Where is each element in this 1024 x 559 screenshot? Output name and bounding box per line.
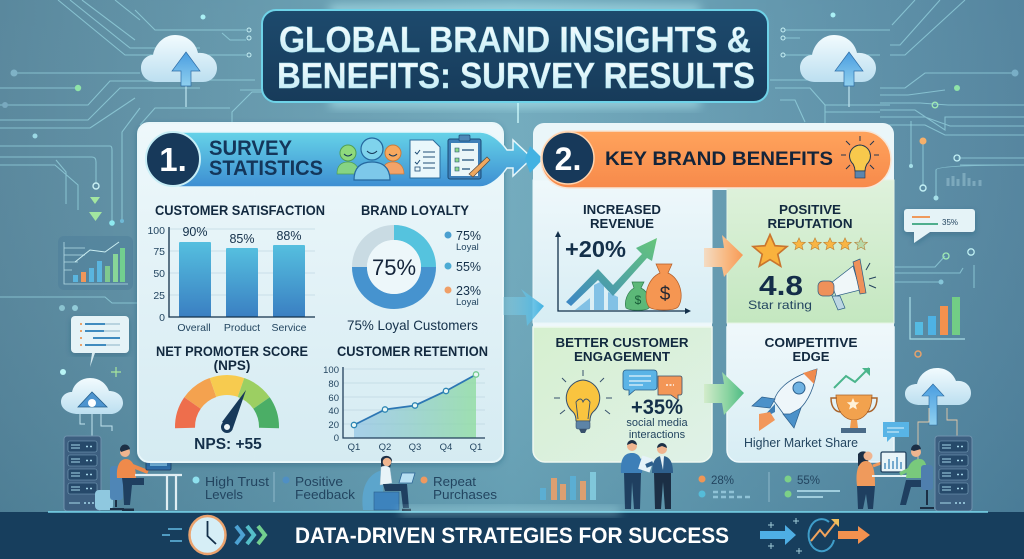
icon: stars [753,234,867,266]
circuit lines right [880,0,1024,357]
customer satisfaction chart: 75 [153,246,165,258]
legend: high trust levels [192,474,269,502]
header text 1: STATISTICS [209,157,323,180]
mini stats bottom [698,472,840,502]
icon: person at desk left [110,444,182,510]
customer retention chart: 40 [328,406,339,417]
nps gauge: (NPS) [214,358,250,373]
customer retention chart: Q4 [440,442,452,453]
icon: growth arrows [760,518,870,554]
icon: lightbulb header [841,136,879,178]
icon: clipboard [448,135,490,179]
legend: positive feedback: Feedback [295,487,356,502]
donut legend: 55% [456,260,481,274]
customer satisfaction chart: Service [271,322,307,334]
customer satisfaction chart: 0 [159,312,165,324]
legend: high trust levels: Levels [205,487,244,502]
customer satisfaction chart: 88% [276,229,302,243]
donut legend: Loyal [456,242,479,253]
donut legend: 75% [456,229,481,243]
arrow tip: statistics to benefits [525,146,543,173]
footer text: DATA-DRIVEN STRATEGIES FOR SUCCESS [295,523,729,548]
donut legend: Loyal [456,297,479,308]
icon: money bags: $ [660,284,671,305]
icon: trophy with trend arrow [831,368,877,433]
quadrant: competitive edge [727,327,894,462]
icon: cloud upload top left [141,35,217,107]
customer satisfaction chart: CUSTOMER SATISFACTION [155,202,325,218]
section header 2 [541,131,891,188]
icon: checklist document [410,140,440,178]
customer retention chart: 80 [328,379,339,390]
panel: key brand benefits [525,123,894,462]
customer retention chart: 0 [334,433,339,444]
number badge 2: 2. [555,141,581,177]
legend: repeat purchases: Repeat [433,474,476,489]
number badge 2 [542,132,594,184]
quadrant: better customer engagement [533,327,712,462]
icon: presenting woman [856,451,884,509]
icon: chat bubble right: 35% [942,218,958,227]
customer satisfaction chart: Overall [177,322,211,334]
legend: positive feedback: Positive [295,474,343,489]
header text 1 [209,137,323,180]
quadrant: better customer engagement: interactions [629,429,686,441]
quadrant: better customer engagement: BETTER CUSTOMER [556,335,689,350]
connector arrow between panels [503,289,544,326]
customer retention chart: 60 [328,393,339,404]
section header 2: KEY BRAND BENEFITS [605,148,833,170]
icon: cloud upload top right [800,35,876,107]
header text 1: SURVEY [209,137,292,160]
icon: cloud and server left [60,367,123,511]
icon: megaphone [818,259,876,310]
customer retention chart: Q3 [409,442,421,453]
number badge 1: 1. [159,141,187,178]
customer retention chart: Q2 [379,442,391,453]
brand loyalty donut: 75% [372,255,416,280]
quadrant: competitive edge: EDGE [792,349,830,364]
title banner [262,5,768,107]
customer satisfaction chart: Product [224,322,260,334]
quadrant: better customer engagement: ENGAGEMENT [574,349,670,364]
customer satisfaction chart: 25 [153,290,165,302]
customer retention chart [323,344,488,453]
number badge 1 [146,132,200,186]
quadrant: positive reputation: Star rating [748,298,812,312]
customer retention chart: Q1 [470,442,482,453]
mini bar chart bottom [540,472,596,500]
brand loyalty donut: BRAND LOYALTY [361,202,470,218]
customer retention chart: Q1 [348,442,360,453]
donut legend [444,229,481,308]
icon: small chart left [58,236,133,290]
icon: chat bubbles [623,370,682,400]
icon: chat bubble right [904,209,975,243]
icon: woman with laptop [362,456,415,510]
icon: chat list left [59,305,129,367]
quadrant: better customer engagement: +35% [631,396,683,419]
arrow: engagement to competitive edge [704,372,744,415]
quadrant: positive reputation: REPUTATION [768,217,852,231]
legend: high trust levels: High Trust [205,474,269,489]
quadrant: increased revenue: +20% [565,236,626,262]
brand loyalty donut: 75% Loyal Customers [347,317,478,333]
customer satisfaction chart: 100 [147,225,165,237]
icon: money bags [625,264,681,310]
nps gauge [156,344,308,453]
icon: chevrons [236,526,265,544]
arrow: revenue to reputation [704,235,743,277]
quadrant: increased revenue: REVENUE [590,217,654,231]
icon: people [337,138,404,180]
icon: man at monitor [872,444,934,508]
section header 1 [146,132,532,187]
legend: repeat purchases [420,474,498,502]
legend: repeat purchases: Purchases [433,487,498,502]
quadrant: increased revenue: INCREASED [583,203,661,217]
quadrant: competitive edge: COMPETITIVE [764,335,858,350]
legend: positive feedback [282,474,356,502]
quadrant: positive reputation [727,180,894,323]
customer satisfaction chart: 90% [182,225,208,239]
customer retention chart: 100 [323,365,339,376]
donut legend: 23% [456,284,481,298]
mini stats bottom: 55% [797,475,820,487]
bars [179,242,305,317]
customer retention chart: 20 [328,420,339,431]
panel: survey statistics [138,123,532,462]
icon: clock [162,516,226,554]
title text: GLOBAL BRAND INSIGHTS & [279,19,751,60]
quadrant: increased revenue [533,180,712,323]
mini stats bottom: 28% [711,475,734,487]
icon: lightbulb [554,370,612,433]
icon: bar chart right [910,297,965,339]
customer satisfaction chart: 85% [229,232,255,246]
icon: cloud and server right [905,368,972,511]
brand loyalty donut [347,202,481,333]
circuit lines left [0,0,200,303]
icon: two colleagues [621,440,673,509]
customer retention chart: CUSTOMER RETENTION [337,344,488,359]
nps gauge: NPS: +55 [194,436,262,453]
nps gauge: NET PROMOTER SCORE [156,344,308,359]
circuit lines beside title [135,10,890,130]
icon: chat bubble near market share [883,422,909,442]
customer satisfaction chart: 50 [153,268,165,280]
customer satisfaction chart [147,202,325,334]
icon: rocket [752,369,817,431]
quadrant: positive reputation: 4.8 [759,270,803,301]
icon: money bags: $ [635,293,642,307]
quadrant: better customer engagement: social media [626,417,688,429]
quadrant: positive reputation: POSITIVE [779,203,841,217]
footer banner [0,508,1024,559]
quadrant: competitive edge: Higher Market Share [744,436,858,450]
title text: BENEFITS: SURVEY RESULTS [277,55,755,96]
title text [277,19,755,96]
